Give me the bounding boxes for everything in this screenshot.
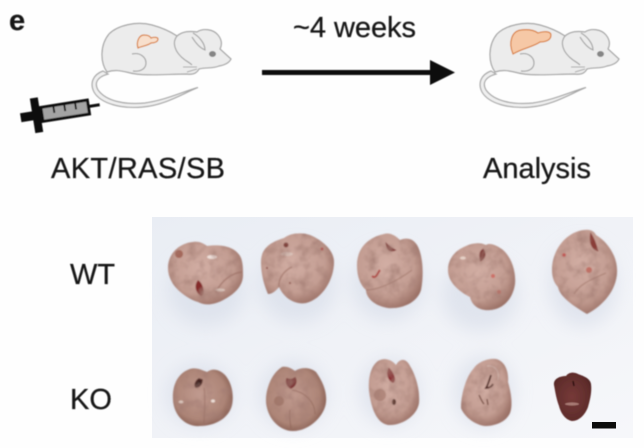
label: analysis: Analysis xyxy=(483,153,591,185)
WT liver 3 xyxy=(357,233,423,308)
arrow xyxy=(262,60,455,85)
KO liver 2 xyxy=(266,367,326,431)
icon: injected mouse xyxy=(92,23,231,107)
label: duration: ~4 weeks xyxy=(293,12,416,44)
WT liver 4 xyxy=(448,243,515,310)
label: KO row: KO xyxy=(70,384,112,416)
KO liver 1 xyxy=(173,368,233,426)
icon: analysis mouse xyxy=(480,23,619,107)
KO liver 4 xyxy=(461,359,511,426)
icon: enlarged liver xyxy=(511,30,551,54)
label: WT row: WT xyxy=(70,259,115,291)
WT liver 5 xyxy=(552,230,617,314)
photo panel: livers xyxy=(152,217,633,438)
label: treatment: AKT/RAS/SB xyxy=(51,153,225,185)
scale bar xyxy=(592,422,616,428)
icon: small liver xyxy=(137,35,158,48)
KO liver 5 xyxy=(554,373,591,421)
WT liver 2 xyxy=(261,233,334,303)
icon: syringe xyxy=(18,88,102,135)
WT liver 1 xyxy=(168,242,243,304)
panel label: e xyxy=(9,5,25,37)
KO liver 3 xyxy=(369,359,419,425)
